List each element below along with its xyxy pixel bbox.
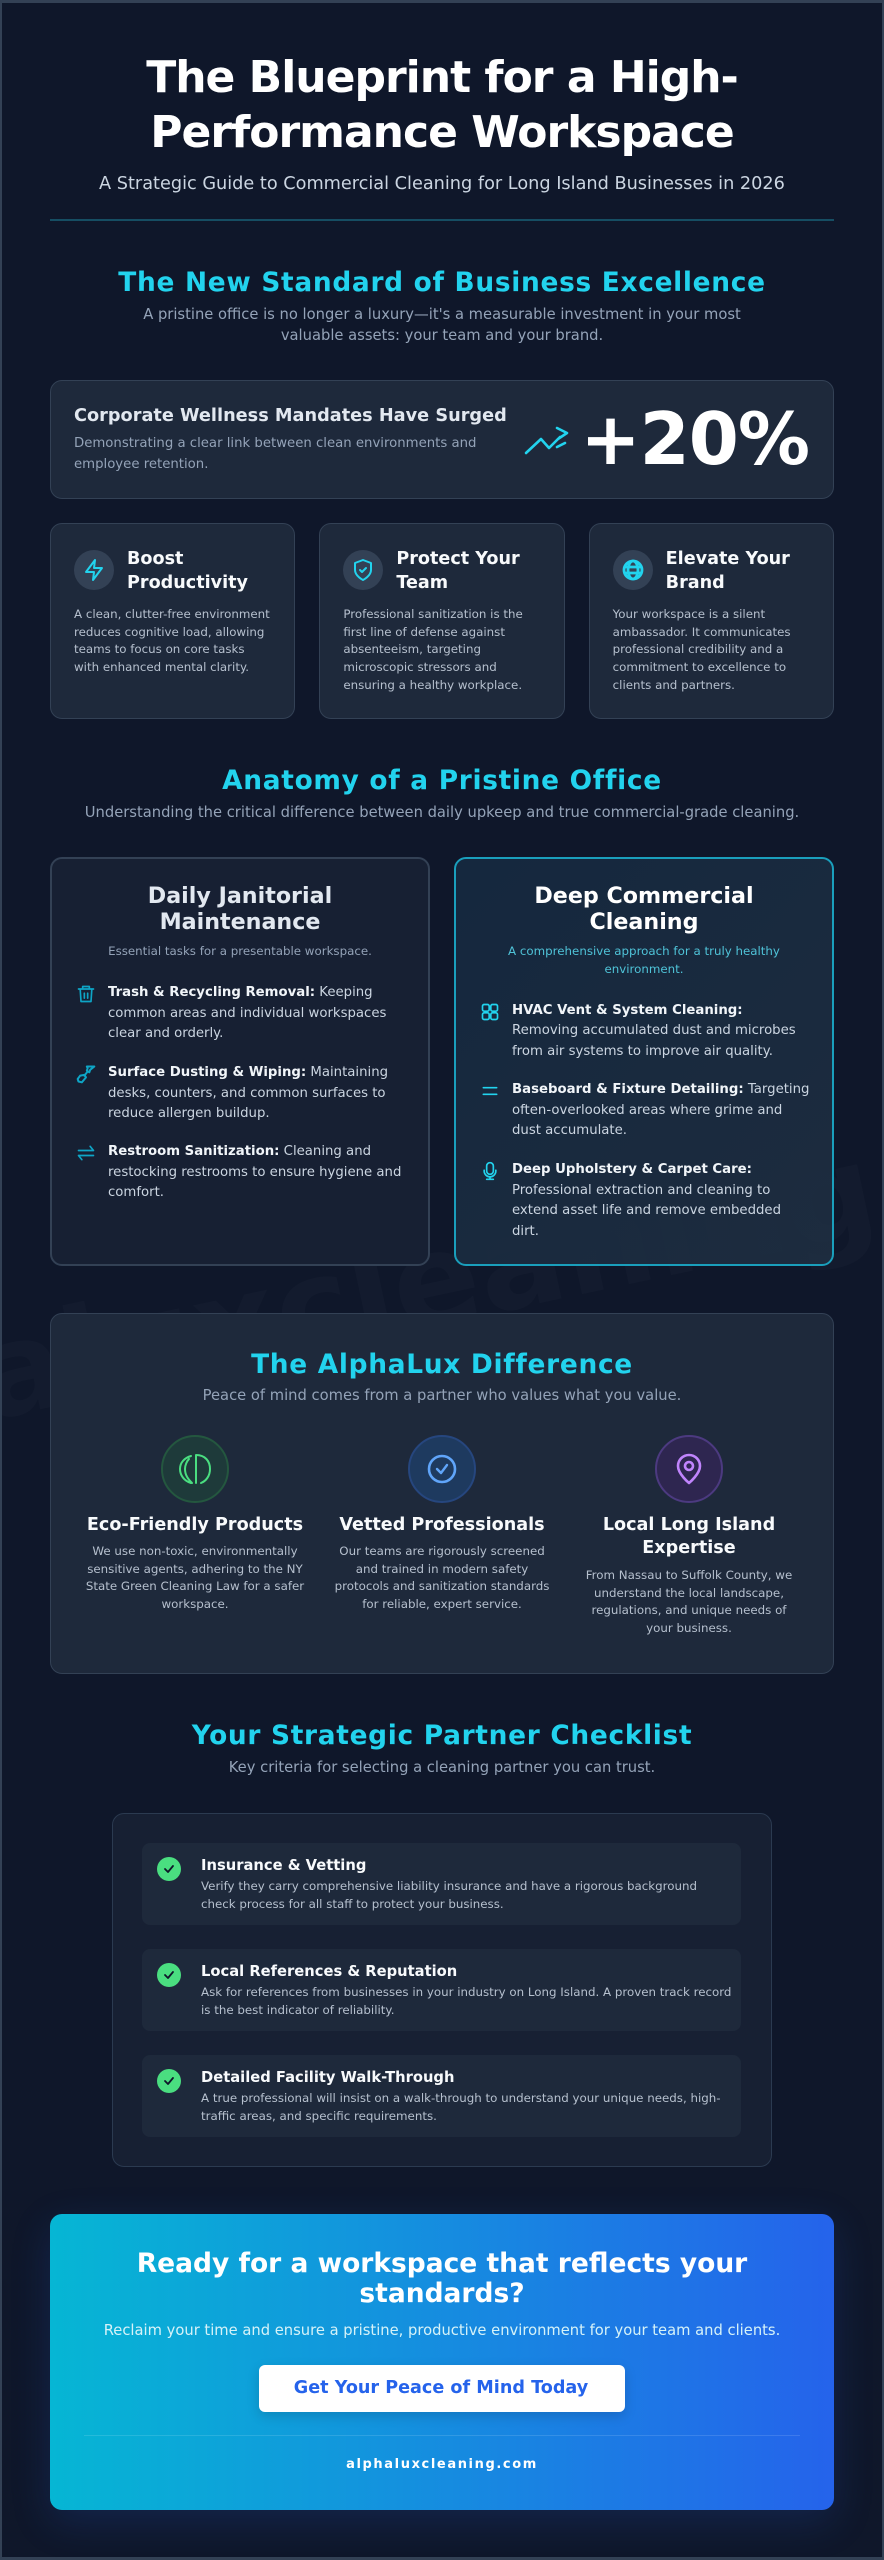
list item: restroom: Restroom Sanitization: Cleaning and: [108, 1144, 371, 1159]
panel: call to action: [50, 2214, 834, 2510]
list item: upholstery: Deep Upholstery & Carpet Care:: [512, 1162, 752, 1177]
column: eco-friendly: [86, 1515, 304, 1611]
subtitle: A Strategic Guide to Commercial Cleaning for Long Island Businesses in 2026: [99, 174, 785, 194]
cta button: Get Your Peace of Mind Today: [294, 2378, 588, 2398]
icon: eco leaf: [161, 1435, 229, 1503]
column: vetted professionals: Our teams are rigorously screened: [339, 1544, 545, 1558]
panel: daily janitorial: [50, 857, 430, 1266]
panel: elevate your brand: Elevate Your: [666, 549, 790, 569]
cta heading: [137, 2248, 748, 2309]
cta button: [259, 2365, 625, 2412]
panel: checklist: [112, 1813, 772, 2167]
panel: daily janitorial: Essential tasks for a presentable workspace.: [108, 944, 372, 958]
checklist item: walk-through: Detailed Facility Walk-Through: [201, 2069, 454, 2086]
panel: protect your team: [319, 523, 565, 719]
icon: globe: [613, 550, 653, 590]
list item: trash: common areas and individual workspaces: [108, 1006, 386, 1021]
header divider: [50, 219, 834, 221]
list item: restroom: comfort.: [108, 1185, 164, 1200]
stat description: Demonstrating a clear link between clean environments and: [74, 436, 476, 451]
icon: lightning: [74, 550, 114, 590]
intro text: A pristine office is no longer a luxury—it's a measurable investment in your most: [143, 306, 741, 323]
list item: hvac: from air systems to improve air quality.: [512, 1044, 773, 1059]
cta heading: standards?: [359, 2278, 525, 2309]
list item: dusting: [76, 1065, 388, 1121]
stat description: employee retention.: [74, 457, 208, 472]
checklist item: references: Ask for references from businesses in your industry on Long Island. A proven track record: [201, 1985, 731, 1999]
panel: protect your team: ensuring a healthy workplace.: [343, 678, 522, 692]
icon: trending arrow: [524, 426, 568, 454]
website: alphaluxcleaning.com: [346, 2457, 538, 2472]
heading: anatomy: Anatomy of a Pristine Office: [222, 765, 662, 796]
alphalux subtitle: Peace of mind comes from a partner who values what you value.: [203, 1387, 681, 1404]
panel: boost productivity: Boost: [127, 549, 183, 569]
panel: elevate your brand: [589, 523, 834, 719]
list item: trash: clear and orderly.: [108, 1026, 223, 1041]
list item: dusting: Surface Dusting & Wiping: Maintaining: [108, 1065, 388, 1080]
title: [146, 52, 738, 158]
column: eco-friendly: We use non-toxic, environmentally: [92, 1544, 298, 1558]
panel: elevate your brand: clients and partners.: [613, 678, 735, 692]
panel: elevate your brand: ambassador. It communicates: [613, 625, 791, 639]
list item: baseboard: dust accumulate.: [512, 1123, 627, 1138]
list item: hvac: [482, 1002, 796, 1059]
heading: alphalux: The AlphaLux Difference: [251, 1349, 633, 1380]
panel: protect your team: Team: [396, 573, 448, 593]
checklist item: walk-through: [142, 2055, 741, 2137]
panel: protect your team: Professional sanitization is the: [343, 607, 523, 621]
panel: boost productivity: reduces cognitive load, allowing: [74, 625, 264, 639]
column: vetted professionals: and trained in modern safety: [356, 1562, 528, 1576]
panel: stat callout: [50, 380, 834, 499]
checklist item: insurance: [142, 1843, 741, 1925]
heading: new standard: The New Standard of Business Excellence: [118, 267, 766, 298]
panel: deep commercial: environment.: [604, 962, 684, 976]
panel: protect your team: microscopic stressors and: [343, 660, 497, 674]
panel: protect your team: Protect Your: [396, 549, 520, 569]
panel: deep commercial: Cleaning: [590, 909, 698, 935]
stat heading: Corporate Wellness Mandates Have Surged: [74, 406, 507, 426]
panel: deep commercial: Deep Commercial: [534, 883, 754, 909]
panel: boost productivity: teams to focus on core tasks: [74, 642, 244, 656]
heading: checklist: Your Strategic Partner Checklist: [192, 1720, 692, 1751]
list item: dusting: reduce allergen buildup.: [108, 1106, 270, 1121]
list item: upholstery: [483, 1162, 781, 1239]
list item: baseboard: [482, 1082, 809, 1138]
column: eco-friendly: State Green Cleaning Law for a safer: [86, 1579, 304, 1593]
checklist item: walk-through: A true professional will insist on a walk-through to understand your unique needs, high-: [201, 2091, 721, 2105]
list item: trash: [78, 985, 386, 1041]
list item: hvac: HVAC Vent & System Cleaning:: [512, 1002, 743, 1018]
title: The Blueprint for a High-: [146, 52, 738, 103]
panel: elevate your brand: Brand: [666, 573, 725, 593]
column: eco-friendly: sensitive agents, adhering to the NY: [87, 1562, 303, 1576]
stat description: [74, 436, 476, 472]
checklist item: references: is the best indicator of reliability.: [201, 2003, 394, 2017]
column: vetted professionals: for reliable, expert service.: [362, 1597, 522, 1611]
list item: baseboard: Baseboard & Fixture Detailing: Targeting: [512, 1082, 809, 1097]
panel: deep commercial: A comprehensive approach for a truly healthy: [508, 944, 780, 958]
panel: protect your team: absenteeism, targeting: [343, 642, 481, 656]
panel: elevate your brand: commitment to excellence to: [613, 660, 786, 674]
anatomy subtitle: Understanding the critical difference between daily upkeep and true commercial-grade cleaning.: [85, 804, 799, 821]
panel: boost productivity: [50, 523, 295, 719]
list item: dusting: desks, counters, and common surfaces to: [108, 1086, 386, 1101]
column: local expertise: [586, 1515, 792, 1635]
list item: upholstery: extend asset life and remove embedded: [512, 1203, 781, 1218]
panel: boost productivity: A clean, clutter-free environment: [74, 607, 270, 621]
list item: upholstery: dirt.: [512, 1224, 539, 1239]
column: local expertise: Expertise: [642, 1538, 736, 1558]
checklist item: insurance: check process for all staff to protect your business.: [201, 1897, 504, 1911]
intro text: valuable assets: your team and your brand.: [281, 327, 603, 344]
column: local expertise: understand the local landscape,: [594, 1586, 784, 1600]
column: local expertise: your business.: [646, 1621, 732, 1635]
checklist item: references: [142, 1949, 741, 2031]
column: eco-friendly: Eco-Friendly Products: [87, 1515, 303, 1535]
icon: vetted check: [408, 1435, 476, 1503]
footer divider: [84, 2435, 800, 2436]
list item: restroom: restocking restrooms to ensure hygiene and: [108, 1165, 401, 1180]
title: Performance Workspace: [150, 107, 734, 158]
panel: boost productivity: Productivity: [127, 573, 248, 593]
panel: alphalux difference: [50, 1313, 834, 1674]
list item: upholstery: Professional extraction and cleaning to: [512, 1183, 770, 1198]
column: eco-friendly: workspace.: [161, 1597, 229, 1611]
cta heading: Ready for a workspace that reflects your: [137, 2248, 747, 2279]
panel: elevate your brand: professional credibility and a: [613, 642, 783, 656]
checklist item: walk-through: traffic areas, and specific requirements.: [201, 2109, 437, 2123]
column: vetted professionals: protocols and sanitization standards: [335, 1579, 549, 1593]
cta text: Reclaim your time and ensure a pristine, productive environment for your team and clients.: [104, 2322, 780, 2339]
panel: protect your team: first line of defense against: [343, 625, 505, 639]
list item: hvac: Removing accumulated dust and microbes: [512, 1023, 796, 1038]
checklist item: insurance: Insurance & Vetting: [201, 1857, 366, 1874]
column: local expertise: From Nassau to Suffolk County, we: [586, 1568, 792, 1582]
panel: deep commercial: [454, 857, 834, 1266]
checklist item: insurance: Verify they carry comprehensive liability insurance and have a rigorous background: [201, 1879, 697, 1893]
column: vetted professionals: Vetted Professionals: [339, 1515, 545, 1535]
panel: daily janitorial: Maintenance: [160, 909, 320, 935]
icon: shield: [343, 550, 383, 590]
panel: daily janitorial: Daily Janitorial: [148, 883, 332, 909]
checklist subtitle: Key criteria for selecting a cleaning partner you can trust.: [229, 1759, 655, 1776]
panel: boost productivity: with enhanced mental clarity.: [74, 660, 249, 674]
panel: elevate your brand: Your workspace is a silent: [613, 607, 765, 621]
intro text: [143, 306, 741, 344]
icon: location pin: [655, 1435, 723, 1503]
stat value: +20%: [580, 397, 809, 481]
column: local expertise: Local Long Island: [603, 1515, 775, 1535]
list item: trash: Trash & Recycling Removal: Keeping: [108, 985, 373, 1000]
column: vetted professionals: [335, 1515, 549, 1611]
checklist item: references: Local References & Reputation: [201, 1963, 457, 1980]
column: local expertise: regulations, and unique needs of: [592, 1603, 786, 1617]
list item: baseboard: often-overlooked areas where grime and: [512, 1103, 782, 1118]
list item: restroom: [78, 1144, 401, 1200]
